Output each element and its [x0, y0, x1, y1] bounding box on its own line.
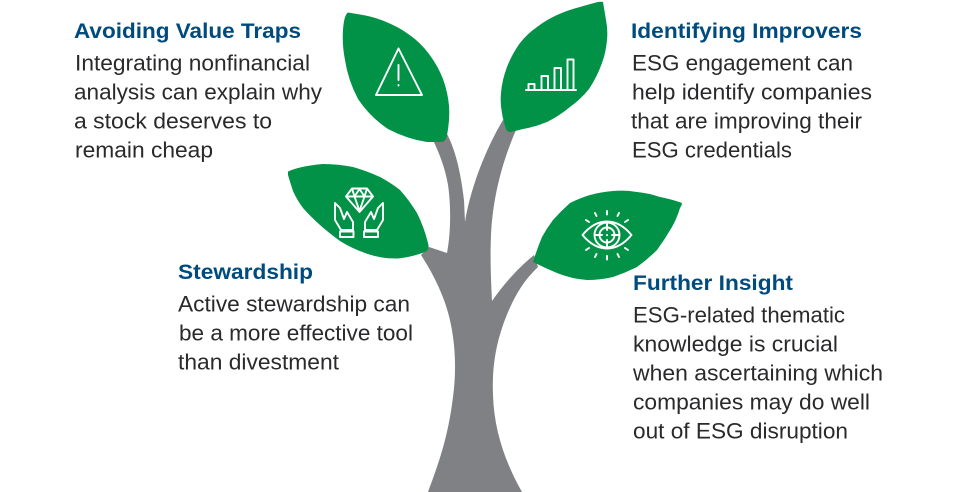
- body: [631, 50, 872, 162]
- text block: stewardship: [178, 261, 413, 374]
- tree trunk and branches: [421, 120, 538, 492]
- body: that are improving their: [631, 108, 862, 134]
- body: ESG credentials: [632, 138, 792, 162]
- heading: Identifying Improvers: [631, 20, 862, 43]
- body: [74, 50, 322, 162]
- text block: identifying improvers: [631, 20, 872, 162]
- icon: hands holding diamond: [335, 188, 383, 237]
- body: [632, 302, 883, 444]
- heading: Further Insight: [633, 272, 793, 295]
- leaf: avoiding value traps: [343, 12, 449, 142]
- heading: Stewardship: [178, 261, 313, 284]
- leaf: stewardship: [288, 164, 429, 259]
- body: than divestment: [178, 350, 339, 374]
- leaf: identifying improvers: [501, 2, 607, 132]
- icon: warning triangle: [376, 48, 422, 95]
- right hand: [364, 203, 383, 237]
- body: [178, 292, 413, 374]
- leaf: further insight: [533, 191, 682, 280]
- text block: further insight: [632, 272, 883, 444]
- body: Active stewardship can: [178, 292, 410, 316]
- body: analysis can explain why: [74, 80, 322, 104]
- body: remain cheap: [75, 138, 213, 162]
- body: ESG-related thematic: [633, 302, 845, 328]
- diamond: [346, 188, 373, 212]
- body: help identify companies: [632, 80, 872, 104]
- icon: eye with target: [582, 211, 632, 260]
- heading: Avoiding Value Traps: [74, 20, 301, 43]
- body: Integrating nonfinancial: [75, 50, 310, 76]
- icon: rising bar chart: [526, 60, 576, 90]
- body: knowledge is crucial: [633, 332, 838, 356]
- body: when ascertaining which: [632, 360, 883, 386]
- left hand: [335, 203, 354, 237]
- body: companies may do well: [633, 390, 870, 414]
- text block: avoiding value traps: [74, 20, 322, 162]
- body: ESG engagement can: [632, 50, 853, 76]
- body: a stock deserves to: [74, 108, 272, 134]
- body: out of ESG disruption: [633, 418, 848, 444]
- body: be a more effective tool: [179, 320, 413, 346]
